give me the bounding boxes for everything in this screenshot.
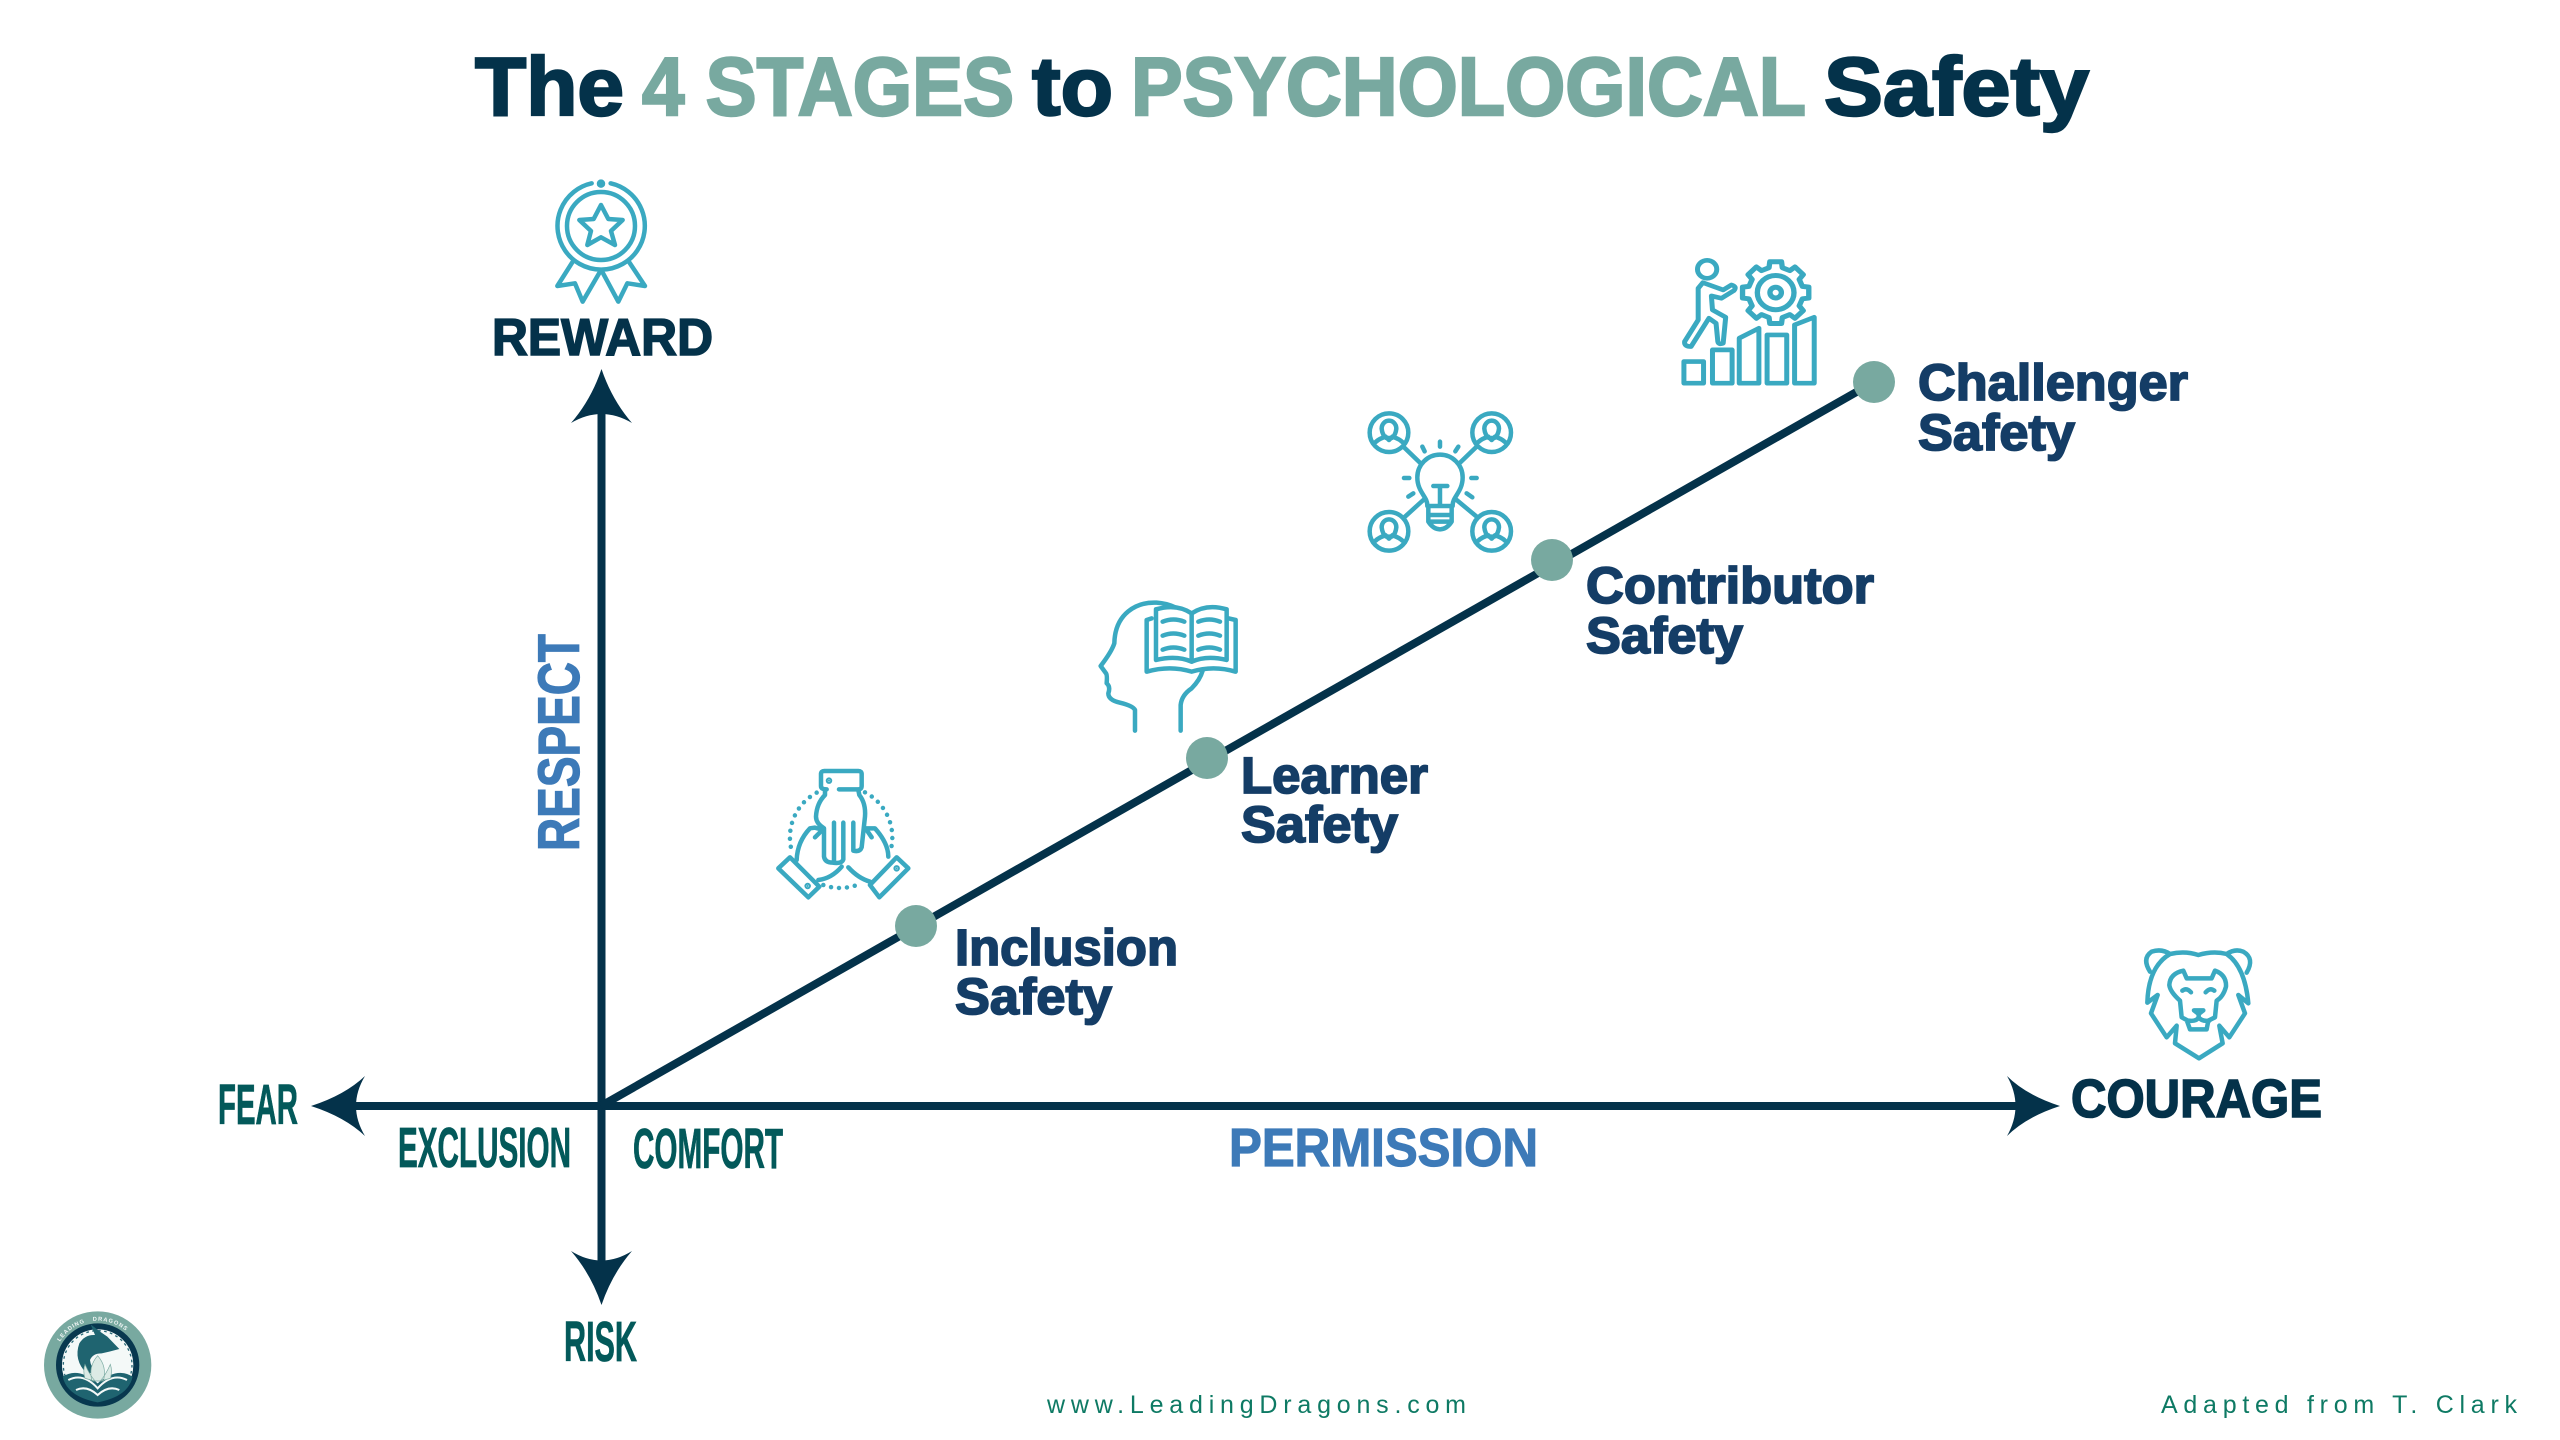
dotted circle bbox=[790, 792, 892, 888]
dot: inclusion bbox=[895, 905, 937, 947]
label: contributor safety: Contributor bbox=[1586, 557, 1874, 614]
lotus bbox=[84, 1356, 111, 1381]
icon: challenger climbing bars and gear bbox=[1684, 260, 1814, 383]
icon: contributor idea network bbox=[1370, 413, 1511, 551]
label: contributor safety bbox=[1586, 557, 1874, 664]
axis label: reward: REWARD bbox=[492, 309, 713, 367]
label: challenger safety: Safety bbox=[1918, 404, 2076, 461]
label: inclusion safety: Safety bbox=[955, 968, 1113, 1025]
label: challenger safety: Challenger bbox=[1918, 354, 2188, 411]
dragon bbox=[77, 1324, 119, 1373]
axis label: exclusion: EXCLUSION bbox=[398, 1116, 571, 1180]
label: inclusion safety: Inclusion bbox=[955, 919, 1178, 976]
axis label: courage: COURAGE bbox=[2071, 1069, 2322, 1129]
label: learner safety bbox=[1241, 747, 1428, 853]
label: learner safety: Learner bbox=[1241, 747, 1428, 804]
title: The bbox=[475, 40, 624, 133]
arrow: down to risk bbox=[571, 1251, 632, 1305]
icon: lion courage bbox=[2146, 950, 2250, 1058]
axis label: permission: PERMISSION bbox=[1229, 1118, 1538, 1178]
dot: learner bbox=[1186, 737, 1228, 779]
axis label: risk: RISK bbox=[564, 1310, 637, 1374]
badge background bbox=[44, 1311, 151, 1419]
diagonal stage line bbox=[601, 382, 1874, 1106]
title: Safety bbox=[1824, 40, 2089, 133]
axis label: respect: RESPECT bbox=[527, 634, 592, 851]
footer: attribution: Adapted from T. Clark bbox=[2161, 1391, 2518, 1419]
title: PSYCHOLOGICAL bbox=[1131, 40, 1806, 133]
waves bbox=[63, 1373, 133, 1402]
footer: website: www.LeadingDragons.com bbox=[1046, 1391, 1466, 1419]
icon: learner head with book bbox=[1101, 603, 1236, 731]
label: learner safety: Safety bbox=[1241, 796, 1399, 853]
stage dots bbox=[895, 361, 1895, 947]
title: to bbox=[1032, 40, 1113, 133]
badge lettering: LEADING DRAGONS bbox=[56, 1316, 128, 1342]
label: inclusion safety bbox=[955, 919, 1178, 1025]
icon: inclusion hands bbox=[778, 771, 908, 897]
title bbox=[475, 40, 2089, 133]
arrow: up to reward bbox=[571, 369, 632, 423]
dot: contributor bbox=[1531, 539, 1573, 581]
axes and arrows bbox=[311, 369, 2060, 1305]
title: 4 STAGES bbox=[642, 40, 1014, 133]
axis label: comfort: COMFORT bbox=[633, 1117, 783, 1181]
dot: challenger bbox=[1853, 361, 1895, 403]
logo: leading dragons badge bbox=[44, 1311, 152, 1419]
horizontal axis bbox=[345, 1102, 2025, 1110]
icon: reward medal bbox=[557, 182, 645, 302]
label: challenger safety bbox=[1918, 354, 2188, 461]
arrow: left to fear bbox=[311, 1076, 365, 1136]
axis label: fear: FEAR bbox=[218, 1073, 298, 1137]
vertical axis bbox=[598, 405, 606, 1270]
label: contributor safety: Safety bbox=[1586, 607, 1744, 664]
arrow: right to courage bbox=[2007, 1076, 2060, 1136]
